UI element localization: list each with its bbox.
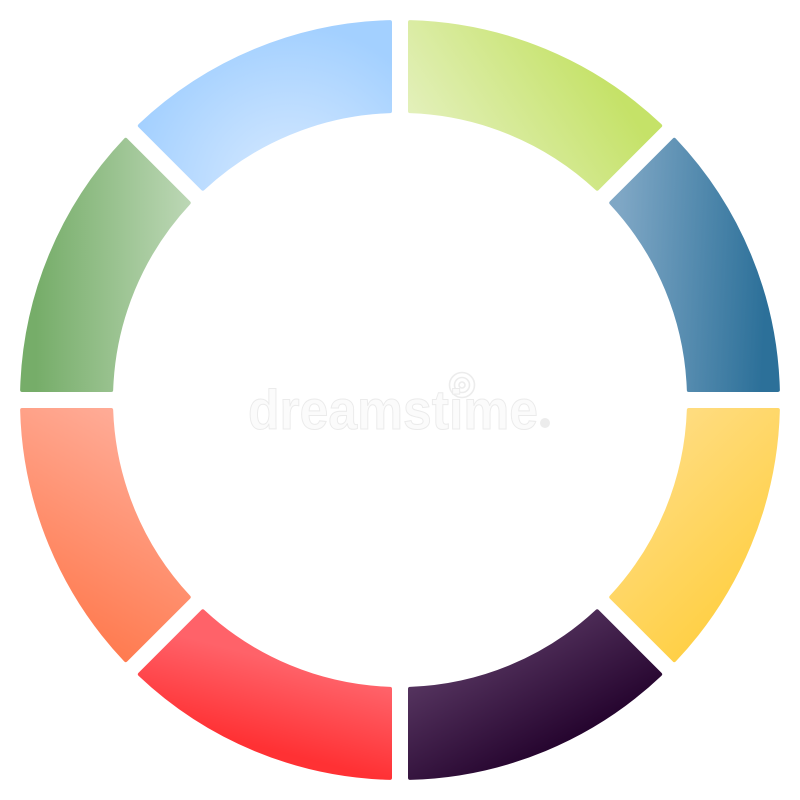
ring segment: steel blue, right upper	[611, 140, 778, 390]
watermark text: dreamstime	[248, 378, 538, 441]
ring segment: light blue, top left	[140, 22, 390, 189]
ring segment: dark purple, bottom right	[410, 611, 660, 778]
watermark	[248, 372, 550, 441]
watermark spiral icon	[450, 372, 474, 398]
ring segment: red, bottom left	[140, 611, 390, 778]
ring segment: green, left upper	[22, 140, 189, 390]
ring segment: orange, left lower	[22, 410, 189, 660]
ring segment: yellow, right lower	[611, 410, 778, 660]
ring segment: lime, top right	[410, 22, 660, 189]
watermark dot	[540, 418, 550, 428]
